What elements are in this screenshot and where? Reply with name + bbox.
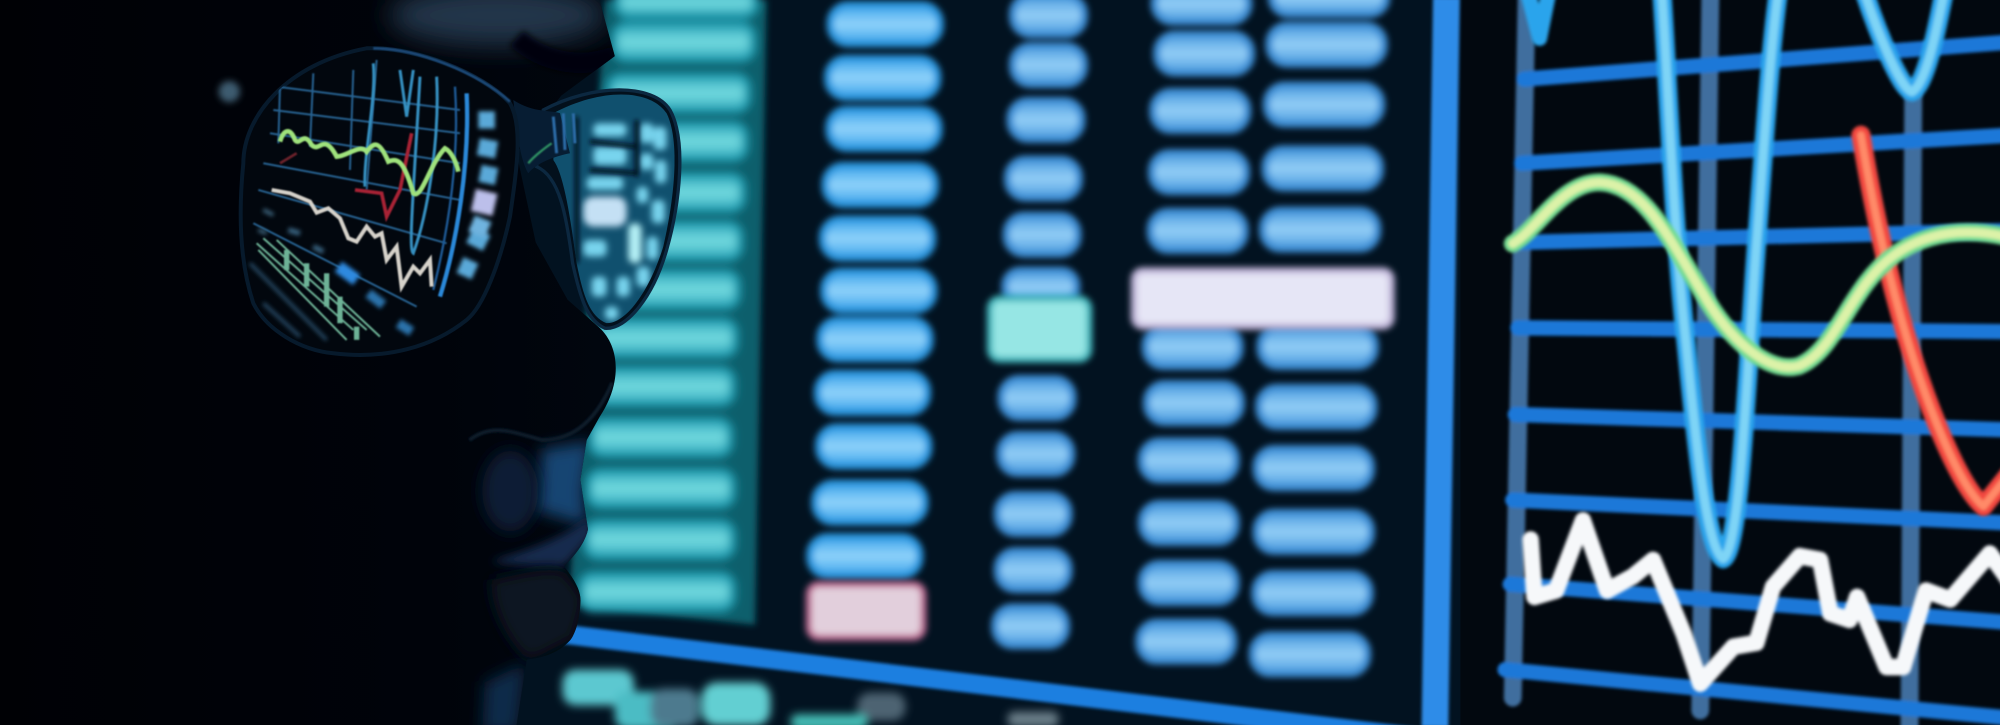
reflected grid (253, 60, 467, 307)
glasses temple glow (219, 81, 240, 102)
line chart (1505, 0, 2000, 725)
sunglasses (219, 48, 683, 355)
reflected white curve (272, 190, 432, 287)
red curve (1861, 135, 2000, 506)
reflected table rows (460, 120, 497, 272)
data column 3 (1139, 0, 1386, 673)
highlighted lilac row (1134, 270, 1392, 327)
bottom partial cells (562, 670, 1059, 725)
left lens (241, 48, 518, 355)
right lens reflection (553, 94, 674, 324)
highlighted teal cell (990, 298, 1089, 360)
eyebrow (517, 38, 615, 63)
person silhouette (0, 0, 616, 725)
reflected mini table (257, 238, 380, 340)
chart grid (1505, 0, 2000, 725)
blue divider bottom (561, 634, 1416, 725)
reflected blue curves (365, 63, 437, 253)
highlighted pink cell (809, 584, 923, 638)
upper lip (491, 517, 592, 566)
frame top highlight (373, 48, 510, 102)
nose edge highlight (469, 383, 612, 440)
chart panel background (1460, 0, 2000, 725)
white curve (1531, 520, 2000, 684)
reflected blue cells (258, 210, 412, 332)
neck light (482, 663, 526, 725)
skin light on forehead, cheek and lips (389, 0, 615, 725)
reflected green curve (280, 131, 458, 194)
nose bridge (513, 100, 570, 173)
teal data column (569, 0, 767, 625)
data column 2 (995, 0, 1084, 645)
left lens reflection (250, 60, 497, 340)
reflected red curve (355, 133, 412, 217)
green curve (1513, 182, 2000, 367)
right lens frame (537, 90, 680, 328)
lower lip (491, 570, 584, 661)
blue divider vertical (1435, 0, 1446, 725)
lit philtrum (536, 441, 592, 526)
blue curve (1528, 0, 1944, 559)
data column 1 (810, 5, 940, 575)
